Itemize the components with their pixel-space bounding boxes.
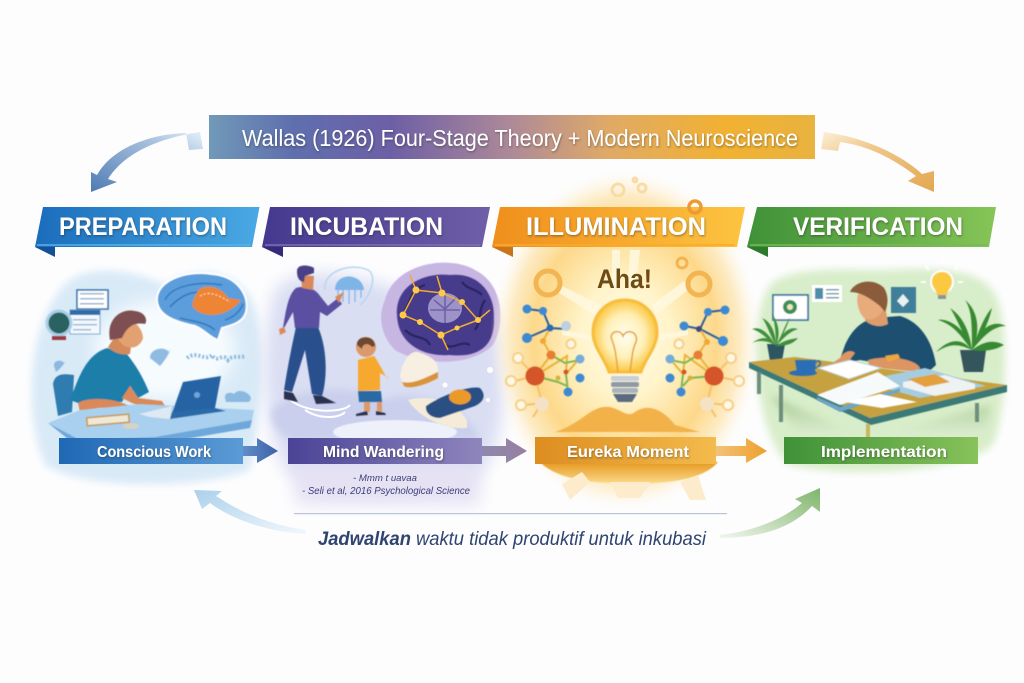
stage banner: incubation <box>262 207 490 257</box>
citation text: - Mmm t uavaa <box>353 473 417 484</box>
panel: preparation <box>31 271 262 484</box>
person at laptop <box>53 311 166 416</box>
citation glow <box>295 465 480 505</box>
white centre glow <box>95 300 235 400</box>
label: conscious work: Conscious Work <box>97 444 211 461</box>
desk <box>749 357 1007 438</box>
arrow: bottom right <box>720 488 820 538</box>
bread and pillow objects <box>400 352 484 428</box>
light rays <box>556 250 689 340</box>
citation text <box>302 473 470 497</box>
label: mind wandering <box>288 438 482 464</box>
ground swirls <box>272 390 480 444</box>
icon: hearts and clouds <box>54 349 251 402</box>
stage banner: preparation <box>35 207 260 257</box>
title banner: Wallas (1926) Four-Stage Theory + Modern Neuroscience <box>242 125 798 151</box>
top circles <box>612 178 646 196</box>
arrow: bottom left <box>194 490 306 534</box>
glow <box>490 170 760 510</box>
panel: verification <box>749 258 1007 472</box>
purple brain <box>381 263 500 362</box>
molecule left <box>506 304 584 417</box>
stage banner: verification <box>747 207 996 257</box>
label: conscious work <box>59 438 243 464</box>
child <box>356 337 389 416</box>
icon: brain <box>157 273 247 340</box>
arrow: title to preparation <box>91 132 203 192</box>
man standing <box>279 265 344 404</box>
person reading <box>834 282 936 375</box>
stage banner: verification: VERIFICATION <box>793 213 963 241</box>
mound <box>555 407 700 432</box>
orange rings <box>536 258 710 295</box>
label: eureka moment: Eureka Moment <box>567 444 690 461</box>
lightbulb <box>593 300 657 402</box>
panel background <box>31 271 262 484</box>
desk items <box>789 360 986 412</box>
molecule right <box>666 306 744 417</box>
plants <box>752 300 1006 372</box>
citation text: - Seli et al, 2016 Psychological Science <box>302 485 470 497</box>
label: eureka moment <box>535 437 716 464</box>
stage banner: illumination: ILLUMINATION <box>526 213 706 241</box>
lower triangles <box>562 472 706 500</box>
label: mind wandering: Mind Wandering <box>323 444 444 461</box>
panel: illumination <box>490 170 760 510</box>
divider <box>294 513 727 514</box>
icon: documents <box>47 290 108 340</box>
stage banner: preparation: PREPARATION <box>59 213 227 241</box>
stage banner: incubation: INCUBATION <box>290 213 443 241</box>
arrow: title to verification <box>821 132 934 192</box>
label: implementation: Implementation <box>821 444 947 461</box>
aha text: Aha! <box>597 264 652 294</box>
shadow under desk <box>770 395 990 440</box>
panel background <box>265 274 504 495</box>
arrow: mind wandering to eureka moment <box>482 438 527 463</box>
stage banner: illumination <box>492 201 745 257</box>
takeaway text: Jadwalkan waktu tidak produktif untuk inkubasi <box>318 528 707 550</box>
thought cloud and jellyfish <box>325 267 373 305</box>
sparkles <box>442 367 493 402</box>
lightbulb icon <box>921 258 963 299</box>
desk and laptop <box>48 376 254 447</box>
arrow: conscious work to mind wandering <box>243 438 278 463</box>
wall pictures <box>773 285 916 320</box>
panel background <box>756 269 1005 472</box>
arrow: eureka moment to implementation <box>716 438 767 463</box>
lower glow bowl <box>540 462 718 483</box>
panel: incubation <box>265 263 504 505</box>
label: implementation <box>784 437 978 464</box>
title banner <box>209 115 815 159</box>
